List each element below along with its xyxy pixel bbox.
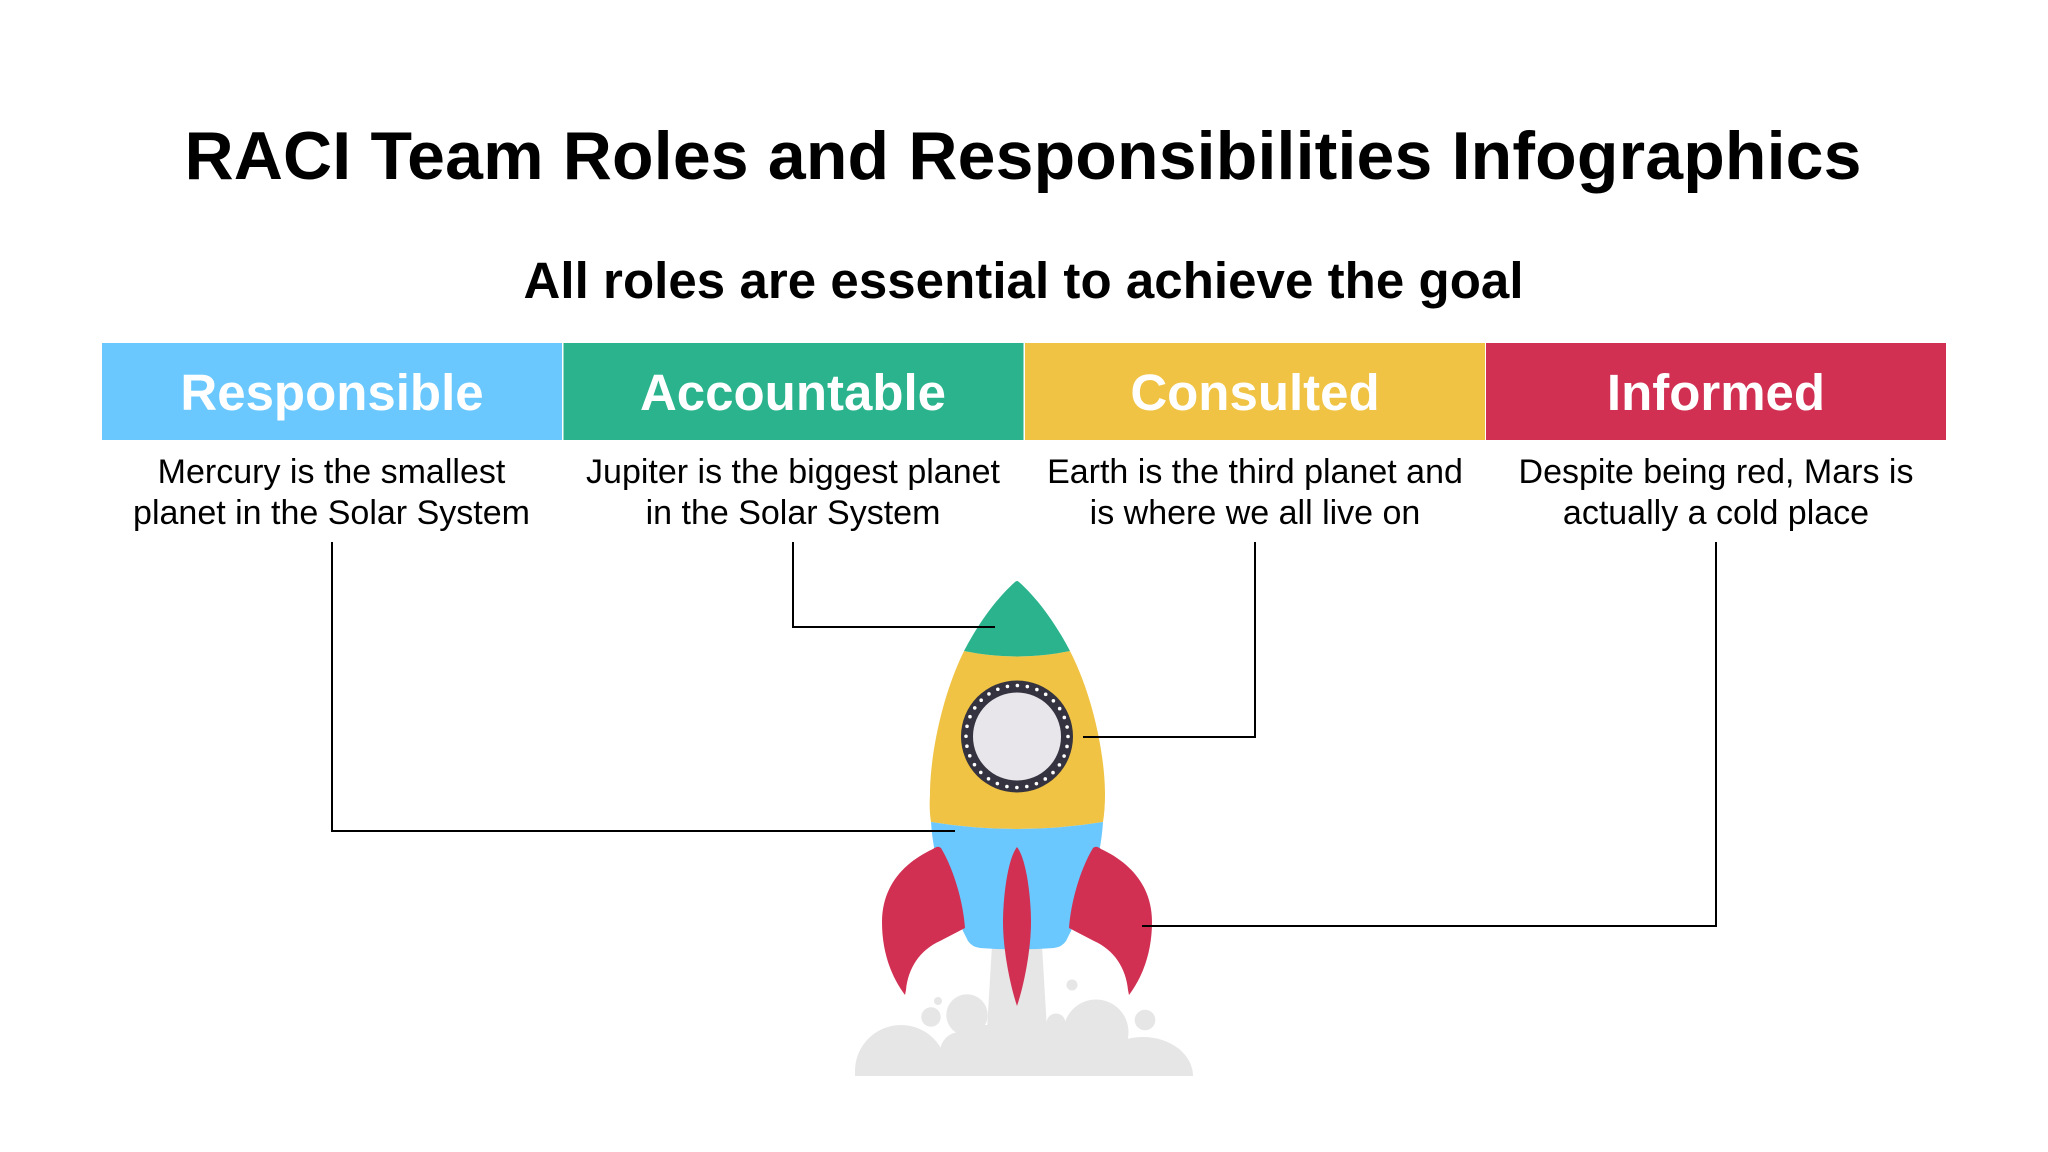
rocket base: blue — [931, 822, 1103, 950]
description: consulted: is where we all live on — [1090, 494, 1420, 532]
description: accountable: Jupiter is the biggest planet — [586, 453, 1001, 491]
header: consulted: Consulted — [1130, 364, 1380, 421]
rocket right fin — [1069, 847, 1152, 995]
connector: informed to rocket fin — [1142, 542, 1716, 926]
header: informed: Informed — [1607, 364, 1825, 421]
rocket left fin — [882, 847, 965, 995]
header: accountable — [564, 343, 1024, 440]
rocket nose: green — [964, 581, 1070, 656]
description: responsible: Mercury is the smallest — [158, 453, 506, 491]
panel: consulted — [1025, 343, 1485, 532]
connector: accountable to rocket nose — [793, 542, 995, 627]
panel: responsible — [102, 343, 562, 532]
header: informed — [1486, 343, 1946, 440]
rocket centre fin — [1003, 847, 1031, 1006]
rocket body: yellow — [930, 651, 1105, 829]
description: informed: actually a cold place — [1563, 494, 1869, 532]
header: consulted — [1025, 343, 1485, 440]
panel: informed — [1486, 343, 1946, 532]
description: responsible: planet in the Solar System — [133, 494, 530, 532]
title: RACI Team Roles and Responsibilities Infographics — [184, 118, 1862, 194]
header: accountable: Accountable — [640, 364, 946, 421]
description: consulted: Earth is the third planet and — [1047, 453, 1463, 491]
icon: rocket — [855, 581, 1193, 1117]
connector: consulted to rocket body — [1083, 542, 1255, 737]
description: accountable: in the Solar System — [646, 494, 940, 532]
connector: responsible to rocket base — [332, 542, 955, 831]
header: responsible — [102, 343, 562, 440]
rocket window — [961, 680, 1073, 792]
subtitle: All roles are essential to achieve the goal — [524, 252, 1524, 309]
rocket exhaust smoke — [855, 948, 1193, 1076]
description: informed: Despite being red, Mars is — [1519, 453, 1913, 491]
panel: accountable — [564, 343, 1024, 532]
header: responsible: Responsible — [180, 364, 484, 421]
